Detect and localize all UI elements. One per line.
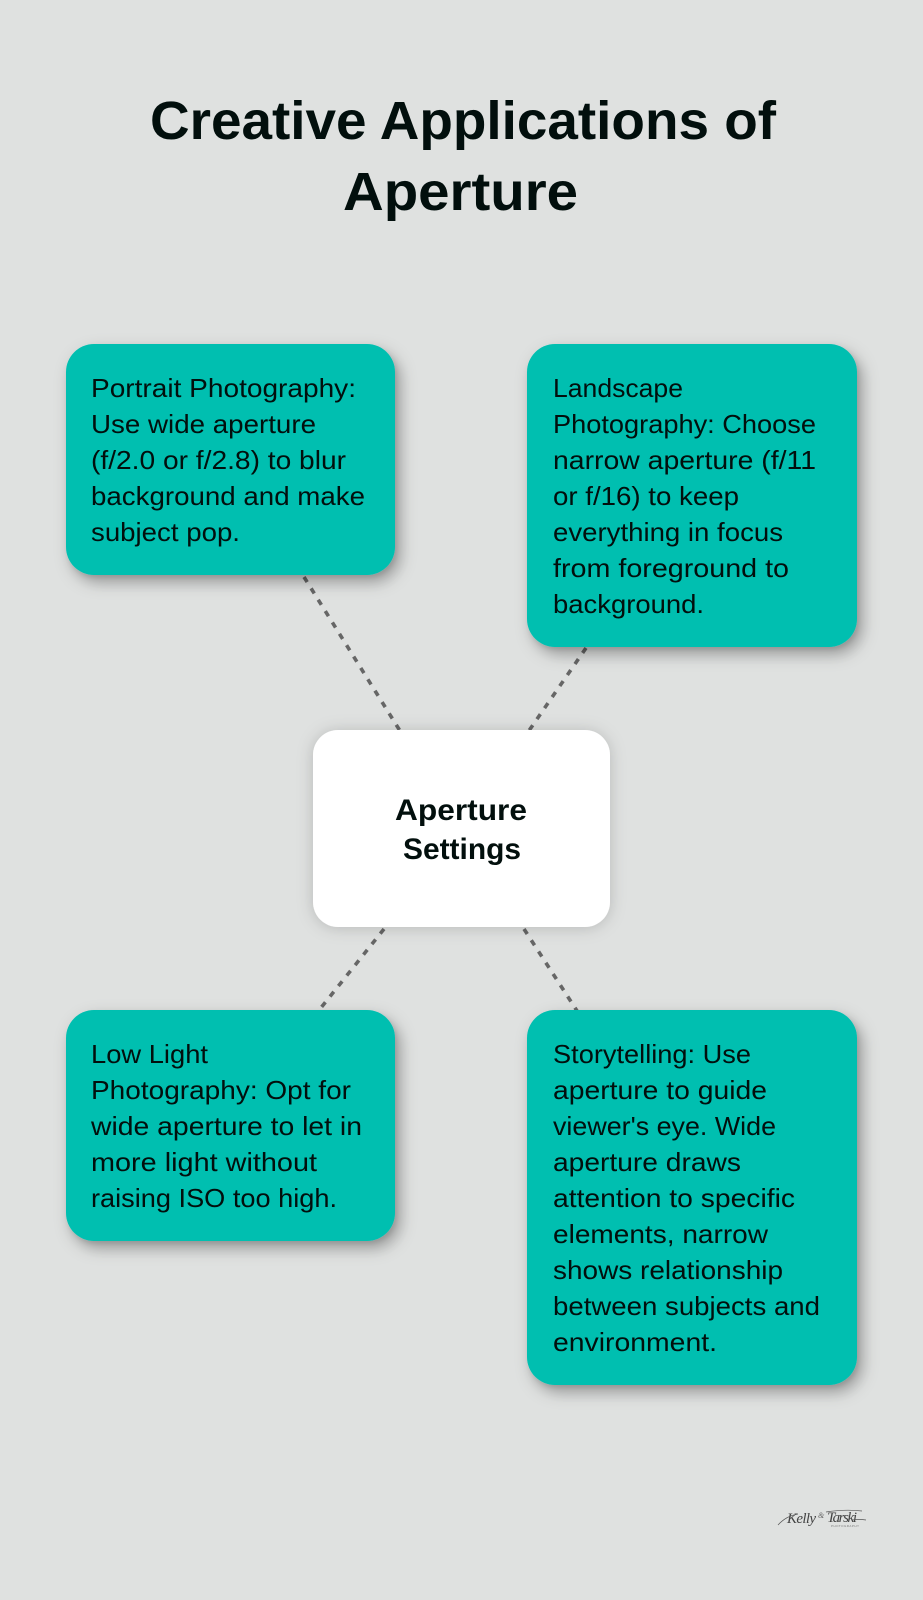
panel: landscape photography: background. xyxy=(553,589,704,619)
panel: low light photography xyxy=(66,1010,395,1241)
panel: storytelling: attention to specific xyxy=(553,1183,795,1213)
panel: landscape photography: narrow aperture (f/11 xyxy=(553,445,816,475)
logo: signature: Kelly xyxy=(786,1511,816,1527)
panel: portrait photography: Use wide aperture xyxy=(91,409,316,439)
panel: storytelling: environment. xyxy=(553,1327,717,1357)
panel: low light photography: raising ISO too high. xyxy=(91,1183,337,1213)
panel: storytelling xyxy=(527,1010,857,1385)
panel: landscape photography: everything in focus xyxy=(553,517,783,547)
panel: storytelling: aperture to guide xyxy=(553,1075,767,1105)
panel: portrait photography: (f/2.0 or f/2.8) to blur xyxy=(91,445,346,475)
title: Aperture xyxy=(343,162,578,222)
logo: signature xyxy=(778,1510,866,1528)
title: Creative Applications of xyxy=(150,91,777,151)
panel: low light photography: more light without xyxy=(91,1147,318,1177)
logo: signature: & xyxy=(818,1511,825,1520)
panel: portrait photography: subject pop. xyxy=(91,517,240,547)
panel: landscape photography: Landscape xyxy=(553,373,683,403)
connector: storytelling to center xyxy=(524,929,579,1014)
panel: storytelling: shows relationship xyxy=(553,1255,783,1285)
panel: storytelling: between subjects and xyxy=(553,1291,820,1321)
panel: center aperture settings: Aperture xyxy=(395,794,527,827)
panel: low light photography: wide aperture to let in xyxy=(90,1111,362,1141)
panel: center aperture settings xyxy=(313,730,610,927)
panel: storytelling: Storytelling: Use xyxy=(553,1039,751,1069)
panel: low light photography: Photography: Opt for xyxy=(91,1075,351,1105)
panel: landscape photography: or f/16) to keep xyxy=(553,481,739,511)
panel: portrait photography: background and make xyxy=(91,481,365,511)
connector: landscape to center xyxy=(526,648,586,735)
panel: center aperture settings: Settings xyxy=(403,833,521,866)
panel: storytelling: elements, narrow xyxy=(553,1219,768,1249)
connector: portrait to center xyxy=(304,577,402,734)
panel: portrait photography xyxy=(66,344,395,575)
title xyxy=(150,91,777,222)
panel: storytelling: aperture draws xyxy=(553,1147,741,1177)
panel: storytelling: viewer's eye. Wide xyxy=(553,1111,776,1141)
logo: signature: Tarski xyxy=(827,1510,857,1526)
logo: signature: PHOTOGRAPHY xyxy=(831,1524,859,1528)
panel: landscape photography: from foreground to xyxy=(553,553,789,583)
connector: low light to center xyxy=(316,929,384,1014)
panel: landscape photography xyxy=(527,344,857,647)
panel: portrait photography: Portrait Photography: xyxy=(91,373,356,403)
panel: landscape photography: Photography: Choose xyxy=(553,409,816,439)
panel: low light photography: Low Light xyxy=(91,1039,209,1069)
